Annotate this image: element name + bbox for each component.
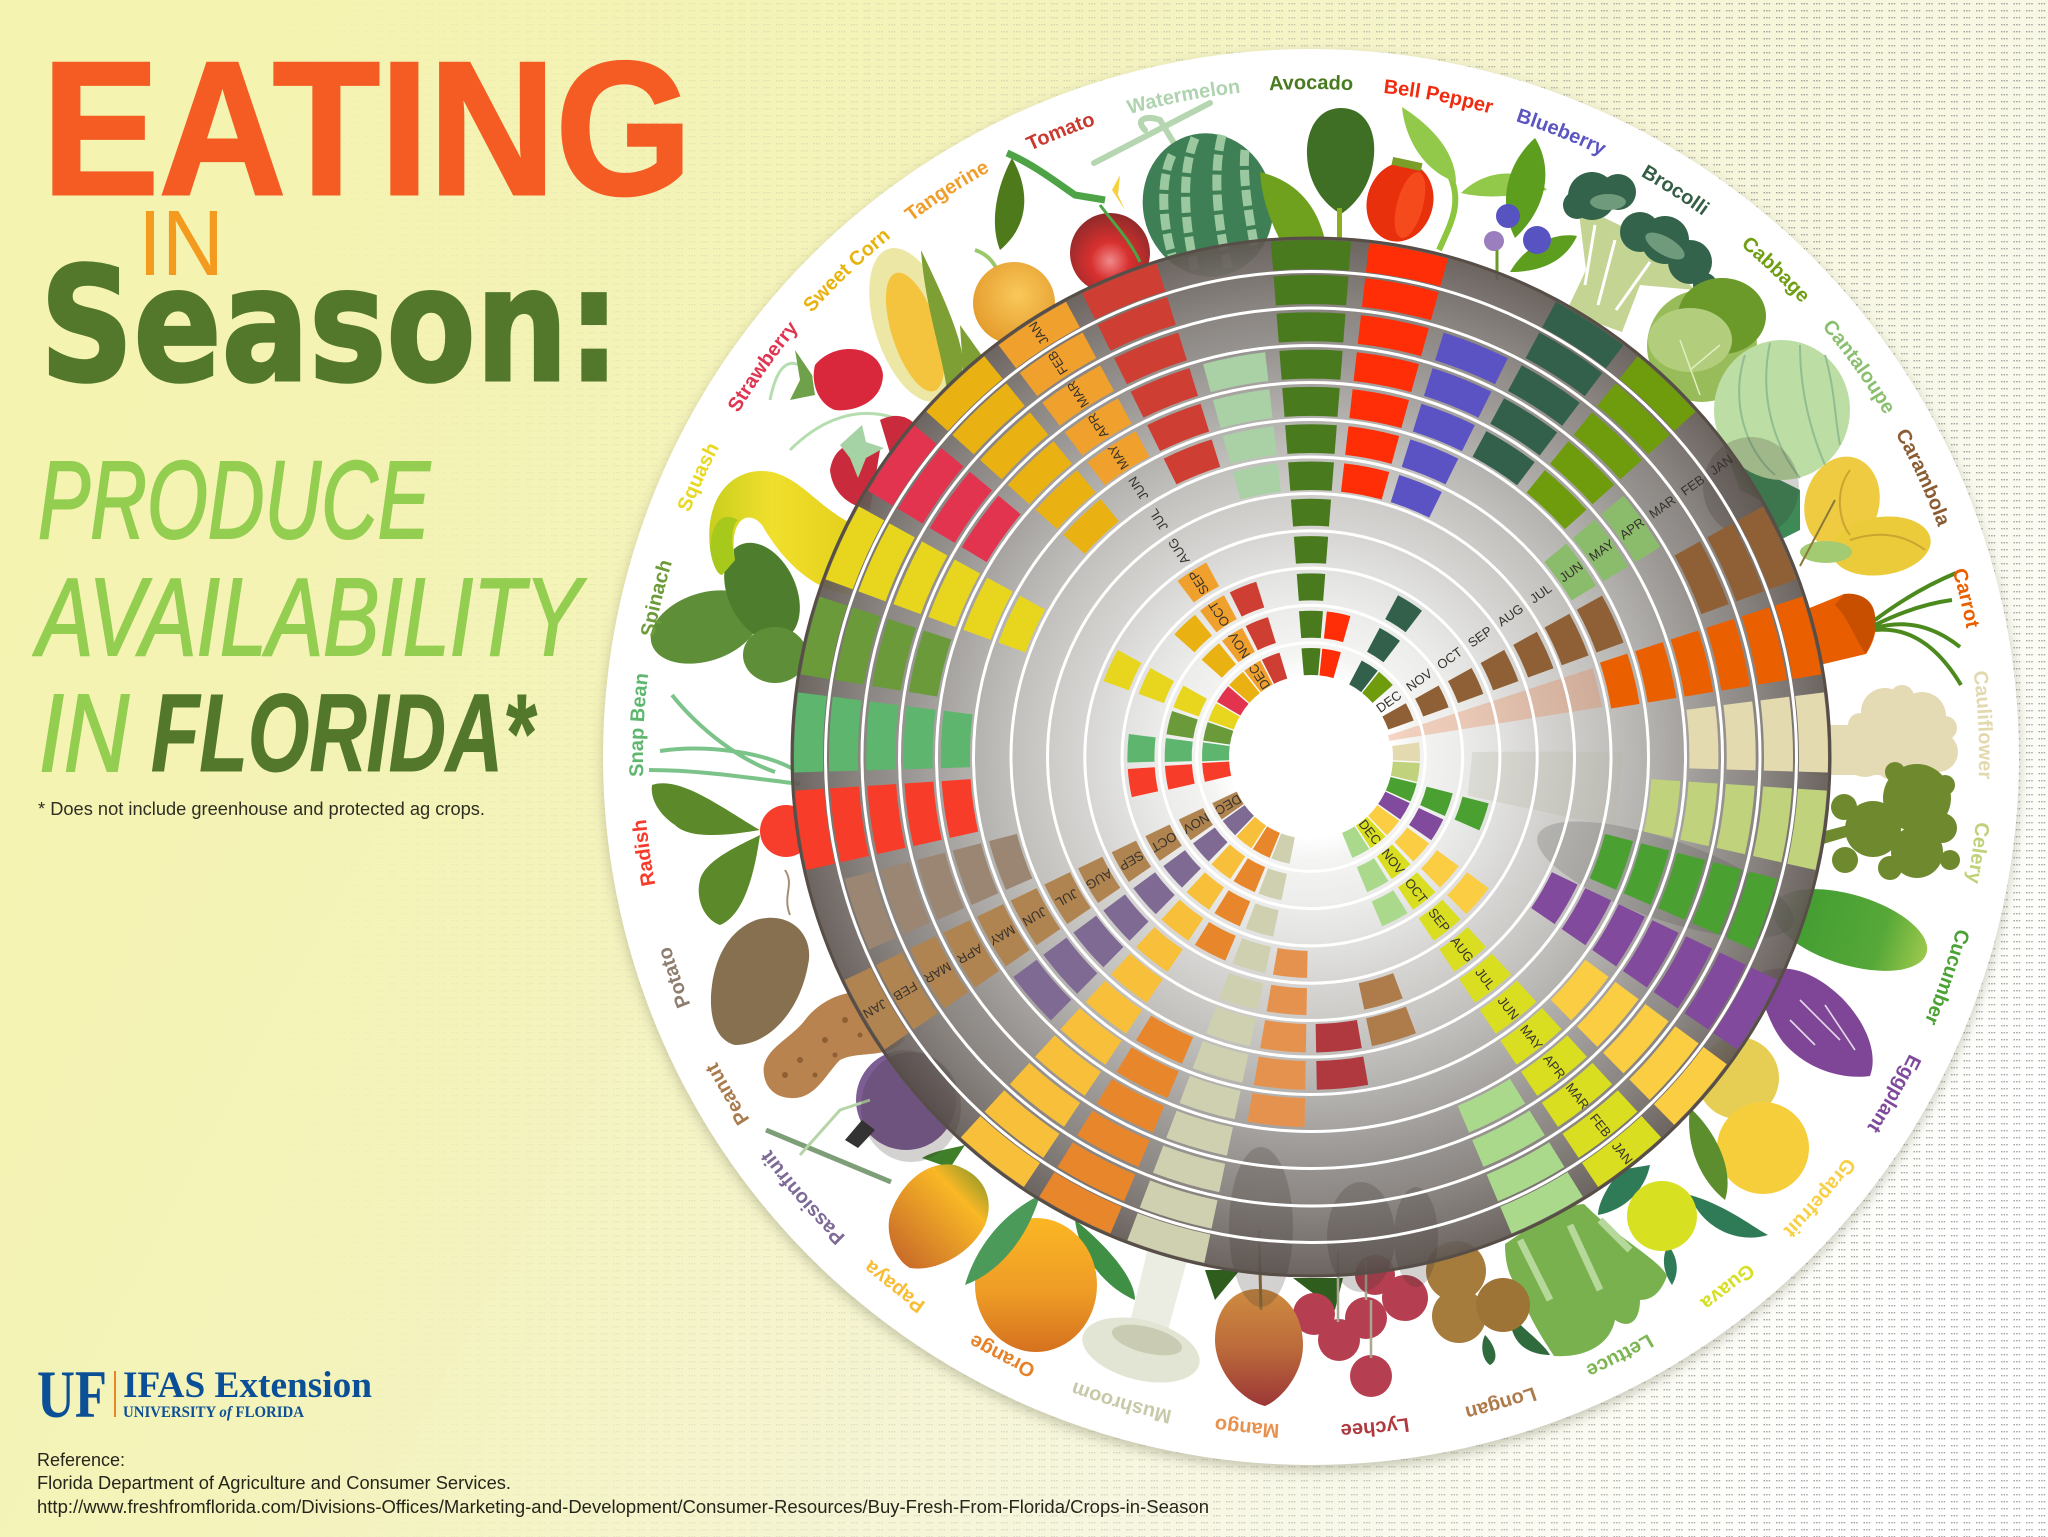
crop name labels: Strawberry xyxy=(728,322,798,412)
month labels: guava spoke: OCT xyxy=(1402,875,1431,906)
spoke: bell pepper xyxy=(1287,242,1448,684)
month labels: peanut spoke: FEB xyxy=(891,978,920,1004)
month labels: guava spoke: MAY xyxy=(1517,1022,1546,1053)
month labels: peanut spoke: APR xyxy=(955,941,985,967)
month labels: peanut spoke: NOV xyxy=(1180,810,1212,837)
icon: watermelon xyxy=(1094,103,1287,289)
title: Eating in Season xyxy=(40,23,692,418)
month labels: cantaloupe spoke: JAN xyxy=(1707,452,1736,478)
month labels: tangerine spoke: JUL xyxy=(1146,506,1171,534)
month labels: tangerine spoke: APR xyxy=(1084,410,1112,441)
crop name labels: Cucumber xyxy=(1926,930,1969,1026)
icon: avocado xyxy=(1260,108,1374,240)
wheel: seasonal chart xyxy=(629,75,1993,1438)
month labels: peanut spoke: JUN xyxy=(1020,904,1049,929)
spoke: blueberry xyxy=(1378,331,1508,523)
crop name labels: Orange xyxy=(971,1336,1034,1376)
month labels: peanut spoke: DEC xyxy=(1213,791,1244,818)
month labels: tangerine spoke: JAN xyxy=(1026,319,1052,348)
month labels: cantaloupe spoke: AUG xyxy=(1495,601,1526,629)
icon: guava xyxy=(1598,1165,1697,1285)
spoke: cantaloupe xyxy=(1540,495,1661,607)
month labels: tangerine spoke: DEC xyxy=(1246,661,1273,692)
logo: UF IFAS Extension xyxy=(37,1356,372,1432)
icon: strawberry xyxy=(770,349,920,510)
spoke: orange xyxy=(1038,811,1309,1235)
subtitle line: PRODUCE: PRODUCE xyxy=(38,439,431,562)
spoke: eggplant xyxy=(1362,763,1779,1050)
crop name labels: Squash xyxy=(678,444,719,511)
month labels: guava spoke: MAR xyxy=(1563,1080,1592,1112)
month labels: tangerine spoke xyxy=(1026,319,1273,692)
icon: tomato xyxy=(1007,153,1150,293)
month labels: cantaloupe spoke: JUL xyxy=(1527,581,1554,606)
icon: passionfruit xyxy=(766,1050,956,1182)
month labels: peanut spoke: JAN xyxy=(860,996,889,1021)
outer wheel edge xyxy=(792,238,1830,1276)
reference text: Reference: xyxy=(37,1450,125,1470)
spoke: cauliflower xyxy=(1391,692,1829,793)
crop name labels: Watermelon xyxy=(1126,82,1240,114)
icon: spinach xyxy=(641,531,815,683)
spoke: cabbage xyxy=(1338,355,1697,726)
spoke: lettuce xyxy=(1313,811,1584,1235)
spoke: potato xyxy=(843,821,1037,950)
icon: mushroom xyxy=(1076,1240,1206,1394)
month labels: guava spoke: JUN xyxy=(1495,993,1522,1023)
icon: squash xyxy=(709,471,865,595)
crop name labels: Grapefruit xyxy=(1783,1160,1854,1238)
spoke: squash xyxy=(824,506,1253,760)
month labels: cantaloupe spoke: OCT xyxy=(1434,644,1465,672)
month labels: cantaloupe spoke: MAR xyxy=(1646,492,1678,521)
icon: snap bean xyxy=(649,695,800,784)
reference text xyxy=(37,1450,1209,1517)
icon: lychee xyxy=(1293,1250,1428,1397)
crop name labels: Tomato xyxy=(1024,116,1094,149)
spoke: cucumber xyxy=(1376,748,1779,950)
month labels: guava spoke: JUL xyxy=(1472,965,1498,992)
spoke: lychee xyxy=(1311,1020,1368,1091)
month labels: guava spoke: SEP xyxy=(1425,905,1453,935)
month labels: guava spoke: JAN xyxy=(1609,1139,1636,1167)
crop name labels: Sweet Corn xyxy=(804,231,890,311)
reference text: Florida Department of Agriculture and Consumer Services. xyxy=(37,1473,511,1493)
icon: grapefruit xyxy=(1689,1037,1809,1238)
spoke: carambola xyxy=(1369,506,1798,760)
subtitle line: AVAILABILITY: AVAILABILITY xyxy=(32,556,586,679)
reference text: http://www.freshfromflorida.com/Divisions-Offices/Marketing-and-Development/Consumer-Resources/Buy-Fresh-From-Florida/Crops-in-Season xyxy=(37,1497,1209,1517)
heading: EATING: EATING xyxy=(42,23,692,235)
crop name labels: Bell Pepper xyxy=(1384,79,1494,113)
crop name labels: Cabbage xyxy=(1744,238,1808,302)
crop name labels: Guava xyxy=(1700,1266,1754,1307)
spoke: sweet corn xyxy=(925,355,1284,726)
month labels: tangerine spoke: AUG xyxy=(1165,535,1193,567)
icon: broccoli xyxy=(1563,172,1717,332)
month labels: cantaloupe spoke: SEP xyxy=(1465,623,1495,650)
spoke: spinach xyxy=(799,596,1241,777)
crop name labels: Peanut xyxy=(706,1062,750,1126)
month labels: guava spoke: NOV xyxy=(1378,846,1408,877)
subtitle line: IN: IN xyxy=(39,672,129,795)
month labels: cantaloupe spoke: JUN xyxy=(1556,558,1586,585)
spoke: brocolli xyxy=(1321,300,1624,710)
icon: cauliflower xyxy=(1810,685,1958,782)
ring lines xyxy=(826,272,1796,1242)
crop name labels: Papaya xyxy=(866,1260,925,1314)
spoke: mango xyxy=(1247,947,1321,1128)
icon: eggplant xyxy=(1755,968,1873,1077)
icon: carrot xyxy=(1785,573,1961,685)
logo: UF IFAS Extension: UNIVERSITY of FLORIDA xyxy=(123,1404,305,1421)
month labels: guava spoke: APR xyxy=(1540,1051,1569,1082)
white disc shadow xyxy=(603,54,2019,1470)
ghost: celery shadow xyxy=(1466,736,1623,827)
crop name labels: Cauliflower xyxy=(1974,671,1993,779)
crop name labels: Radish xyxy=(632,820,656,886)
spoke: celery xyxy=(1386,729,1828,870)
spoke: guava xyxy=(1330,796,1662,1188)
spoke: passionfruit xyxy=(1012,789,1268,1021)
crop name labels: Longan xyxy=(1466,1387,1537,1417)
crop name labels: Celery xyxy=(1964,823,1989,884)
spoke: radish xyxy=(794,729,1236,870)
icon: cantaloupe xyxy=(1714,340,1850,540)
white disc xyxy=(603,49,2019,1465)
spoke: snap bean xyxy=(793,692,1231,793)
spoke: mushroom xyxy=(1127,824,1326,1264)
month labels: tangerine spoke: OCT xyxy=(1205,598,1233,630)
crop name labels: Avocado xyxy=(1270,75,1352,90)
spoke: avocado xyxy=(1271,240,1351,675)
crop name labels: Lychee xyxy=(1341,1416,1409,1437)
month labels: tangerine spoke: JUN xyxy=(1125,474,1152,503)
month labels: cantaloupe spoke: NOV xyxy=(1403,666,1435,694)
crop name labels: Potato xyxy=(661,948,690,1008)
heading: Season: Season: xyxy=(40,234,620,418)
crop name labels: Lettuce xyxy=(1586,1334,1654,1374)
centre hole xyxy=(1231,677,1391,837)
spoke: tangerine xyxy=(998,300,1301,710)
month labels: guava spoke: DEC xyxy=(1356,817,1384,847)
month labels: cantaloupe spoke xyxy=(1373,452,1736,716)
month labels: cantaloupe spoke: DEC xyxy=(1373,688,1404,716)
month labels: guava spoke xyxy=(1356,817,1636,1167)
spoke: carrot xyxy=(1596,596,1823,725)
ghost: cucumber shadow xyxy=(1525,798,1806,962)
crop name labels: Carambola xyxy=(1898,430,1948,528)
icon: orange xyxy=(965,1195,1135,1352)
spoke: papaya xyxy=(960,796,1292,1188)
icon: celery xyxy=(1810,762,1960,880)
month labels: guava spoke: FEB xyxy=(1587,1111,1614,1140)
logo: UF IFAS Extension: IFAS Extension xyxy=(123,1365,372,1406)
subtitle: Produce availability in Florida xyxy=(32,439,586,795)
icon: carambola xyxy=(1794,448,1935,582)
icon: lettuce xyxy=(1505,1204,1667,1356)
crop name labels: Eggplant xyxy=(1867,1054,1922,1133)
crop name labels: Blueberry xyxy=(1516,108,1606,156)
icon: cucumber xyxy=(1763,873,1937,987)
icon: mango xyxy=(1205,1230,1303,1406)
logo: UF IFAS Extension: UF xyxy=(37,1356,107,1432)
icon: bell pepper xyxy=(1358,107,1456,250)
ghost: carrot shadow xyxy=(1374,668,1602,760)
month labels: peanut spoke: SEP xyxy=(1116,848,1146,874)
crop name labels: Mango xyxy=(1216,1416,1278,1438)
footnote: * Does not include greenhouse and protected ag crops. xyxy=(38,798,485,819)
month labels: cantaloupe spoke: APR xyxy=(1617,515,1647,542)
icon: papaya xyxy=(889,1145,989,1269)
month labels: peanut spoke: JUL xyxy=(1053,886,1081,910)
crop name labels: Passionfruit xyxy=(761,1150,845,1246)
month labels: tangerine spoke: SEP xyxy=(1186,568,1212,598)
month labels: tangerine spoke: MAY xyxy=(1104,441,1132,473)
wheel base xyxy=(792,238,1830,1276)
month labels: peanut spoke: AUG xyxy=(1083,866,1115,893)
spoke: watermelon xyxy=(1203,351,1292,502)
crop name labels: Mushroom xyxy=(1072,1382,1171,1424)
crop name labels: Carrot xyxy=(1954,569,1979,628)
month labels: peanut spoke xyxy=(860,791,1244,1021)
month labels: guava spoke: AUG xyxy=(1448,934,1477,965)
icon: tangerine xyxy=(973,158,1055,344)
month labels: tangerine spoke: FEB xyxy=(1045,348,1071,378)
spoke: peanut xyxy=(843,763,1260,1050)
crop name labels xyxy=(629,75,1993,1438)
heading: IN: IN xyxy=(138,191,224,295)
spoke: grapefruit xyxy=(1346,780,1728,1126)
ghost: leaf shadows under bottom rings xyxy=(861,437,1799,1307)
icon: blueberry xyxy=(1461,138,1577,280)
icon: cabbage xyxy=(1647,278,1766,402)
month labels: cantaloupe spoke: MAY xyxy=(1586,536,1617,564)
month labels: peanut spoke: MAY xyxy=(986,922,1018,949)
month labels: tangerine spoke: MAR xyxy=(1064,378,1092,410)
month labels: cantaloupe spoke: FEB xyxy=(1678,472,1707,499)
crop name labels: Tangerine xyxy=(903,164,988,220)
icon: sweet corn xyxy=(852,237,985,413)
month labels: tangerine spoke: NOV xyxy=(1225,629,1253,661)
icon: peanut xyxy=(764,992,905,1098)
spoke: longan xyxy=(1354,972,1416,1047)
spoke: strawberry xyxy=(867,424,1268,742)
subtitle line: FLORIDA: FLORIDA* xyxy=(151,672,538,795)
month labels: peanut spoke: OCT xyxy=(1148,829,1179,855)
month labels: peanut spoke: MAR xyxy=(921,959,954,986)
icon: potato xyxy=(711,870,809,1045)
crop name labels: Brocolli xyxy=(1642,164,1710,216)
spoke: tomato xyxy=(1082,262,1318,696)
produce illustrations xyxy=(641,103,1961,1406)
icon: radish xyxy=(652,783,812,925)
crop name labels: Spinach xyxy=(641,561,672,636)
crop name labels: Snap Bean xyxy=(629,674,648,776)
icon: longan xyxy=(1426,1241,1550,1365)
crop name labels: Cantaloupe xyxy=(1824,320,1892,414)
